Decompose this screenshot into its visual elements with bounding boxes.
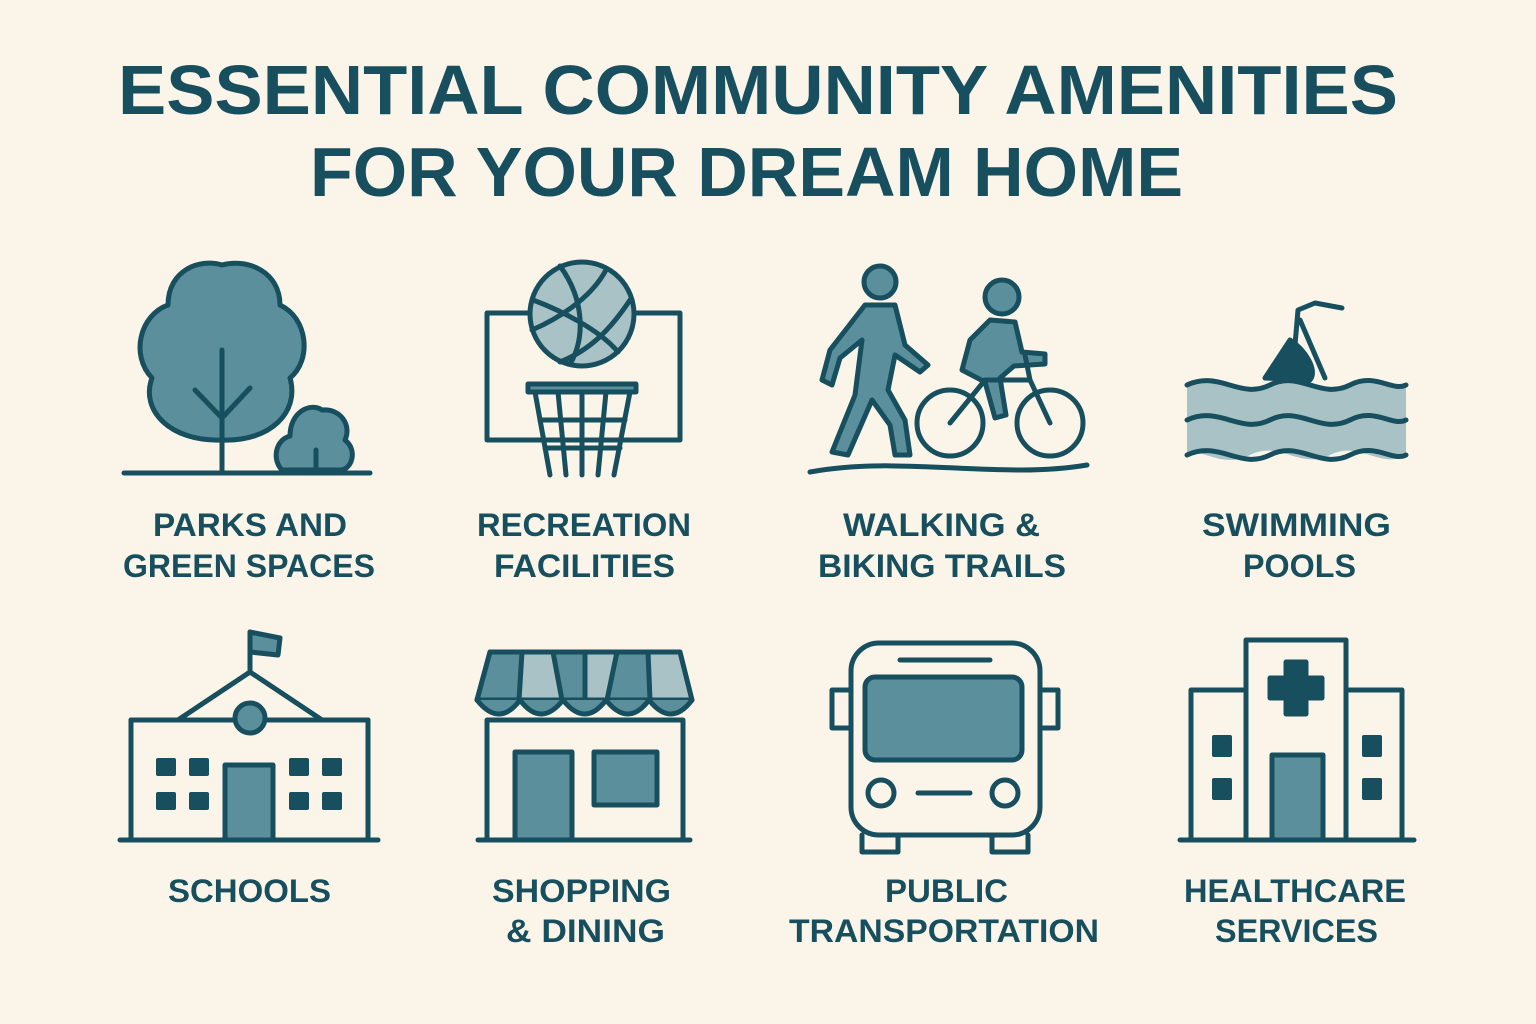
- label: pools: POOLS: [1243, 548, 1356, 584]
- label: parks: GREEN SPACES: [123, 548, 375, 584]
- label: healthcare: SERVICES: [1215, 913, 1378, 949]
- title: ESSENTIAL COMMUNITY AMENITIES: [118, 51, 1398, 129]
- icon: walking and biking: [810, 266, 1087, 472]
- label: shopping: [492, 873, 671, 949]
- icon: shop: [477, 652, 692, 840]
- label: healthcare: [1184, 873, 1406, 949]
- icon: swimming: [1187, 303, 1406, 460]
- label: transportation: TRANSPORTATION: [789, 913, 1099, 949]
- label: healthcare: HEALTHCARE: [1184, 873, 1406, 909]
- icon: parks tree: [124, 263, 370, 473]
- icon: basketball hoop: [487, 262, 680, 475]
- label: shopping: SHOPPING: [492, 873, 671, 909]
- label: shopping: & DINING: [506, 913, 665, 949]
- label: parks: PARKS AND: [153, 507, 347, 543]
- label: parks: [123, 507, 375, 584]
- icon: bus: [832, 643, 1058, 852]
- label: recreation: RECREATION: [477, 507, 691, 543]
- title: [118, 51, 1398, 211]
- label: transportation: PUBLIC: [885, 873, 1008, 909]
- label: recreation: FACILITIES: [494, 548, 675, 584]
- title: FOR YOUR DREAM HOME: [310, 133, 1183, 211]
- label: trails: WALKING &: [843, 507, 1040, 543]
- icon: hospital: [1180, 640, 1414, 840]
- label: trails: BIKING TRAILS: [818, 548, 1066, 584]
- label: pools: SWIMMING: [1202, 507, 1391, 543]
- label: schools: SCHOOLS: [168, 873, 331, 909]
- label: pools: [1202, 507, 1391, 584]
- label: recreation: [477, 507, 691, 584]
- icon: school: [120, 632, 378, 840]
- label: transportation: [789, 873, 1099, 949]
- label: trails: [818, 507, 1066, 584]
